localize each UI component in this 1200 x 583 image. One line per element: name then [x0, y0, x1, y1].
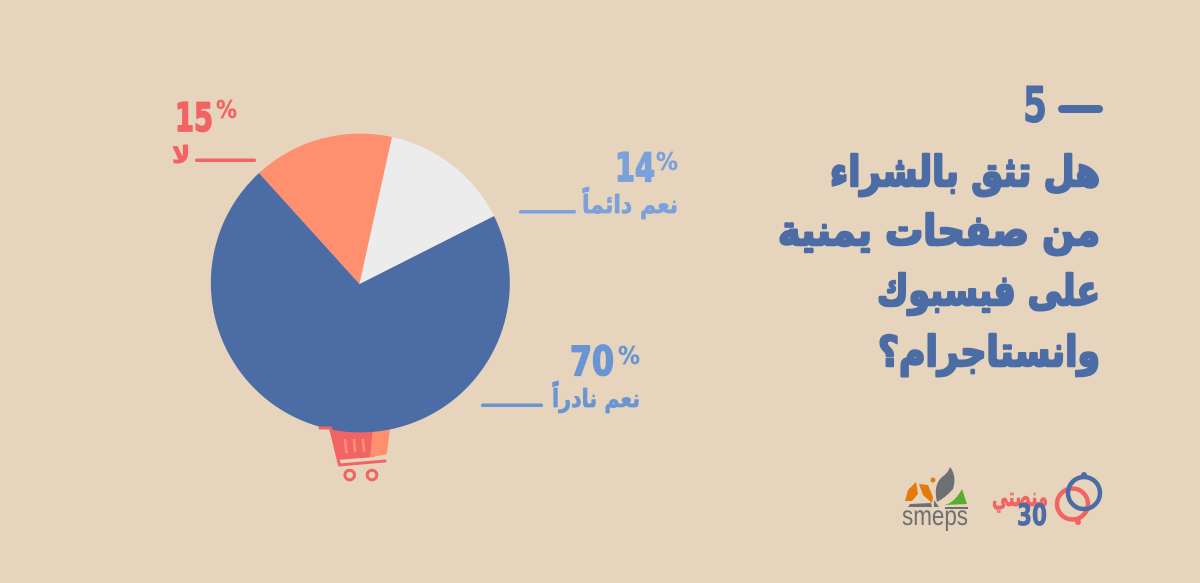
label: 70% نعم نادراً: نعم نادراً: [552, 381, 640, 413]
label: 15% لا: %: [216, 95, 237, 124]
pie chart: [211, 134, 510, 432]
label: 70% نعم نادراً: 70: [570, 339, 614, 385]
label: 15% لا: لا: [172, 141, 190, 169]
heading: question text: من صفحات يمنية: [778, 206, 1100, 256]
icon: cart handle: [320, 428, 332, 434]
label: 15% لا: [172, 95, 256, 169]
logo: smeps: [902, 467, 968, 531]
heading: question number: 5: [1023, 77, 1047, 134]
slice: 15% لا: [259, 134, 392, 284]
icon: shopping cart: [331, 428, 390, 480]
logo: smeps: smeps: [902, 500, 968, 531]
heading: question text: وانستاجرام؟: [878, 327, 1100, 377]
heading: question text: هل تثق بالشراء: [830, 147, 1100, 197]
logo: منصتي 30: منصتي: [992, 482, 1048, 513]
slice: 70% نعم نادراً: [211, 173, 510, 432]
label: 14% نعم دائماً: نعم دائماً: [582, 187, 678, 219]
label: 14% نعم دائماً: [519, 146, 678, 219]
heading: question text: على فيسبوك: [877, 266, 1100, 316]
label: 70% نعم نادراً: %: [618, 341, 640, 370]
heading: question number: [1023, 77, 1103, 134]
logo: منصتي 30: 30: [1017, 498, 1047, 532]
slice: 14% نعم دائماً: [360, 137, 494, 284]
label: 15% لا: 15: [175, 96, 213, 141]
heading: question text: [778, 147, 1100, 377]
logo: منصتي 30: [992, 472, 1100, 532]
label: 14% نعم دائماً: 14: [615, 146, 655, 191]
label: 14% نعم دائماً: %: [656, 147, 678, 176]
label: 70% نعم نادراً: [481, 339, 640, 413]
